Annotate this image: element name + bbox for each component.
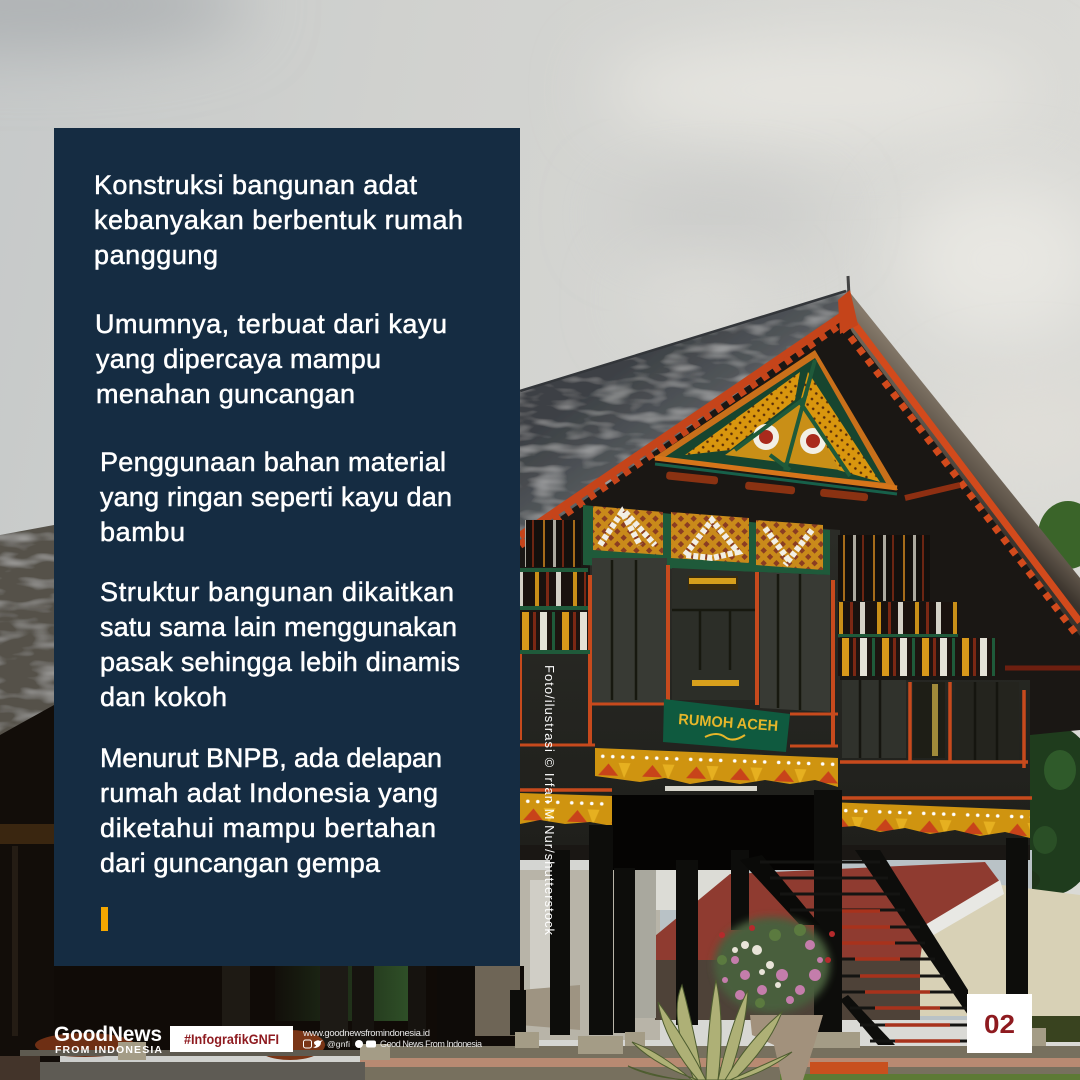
roof underside shadow — [520, 318, 1080, 860]
panel: text background — [54, 128, 520, 966]
text block: point 1 — [94, 170, 463, 270]
text block: point 3: yang ringan seperti kayu dan — [100, 482, 452, 512]
text block: point 1: kebanyakan berbentuk rumah — [94, 205, 463, 235]
text block: point 4: satu sama lain menggunakan — [100, 612, 457, 642]
text block: point 4: Struktur bangunan dikaitkan — [100, 577, 454, 607]
hashtag box: #InfografikGNFI — [184, 1032, 279, 1047]
house walls — [520, 505, 1030, 845]
footer social links — [302, 1028, 482, 1049]
text block: point 5: Menurut BNPB, ada delapan — [100, 743, 442, 773]
text block: point 1: Konstruksi bangunan adat — [94, 170, 417, 200]
text block: point 2 — [95, 309, 447, 409]
sign: Rumoh Aceh: RUMOH ACEH — [678, 711, 779, 735]
agave plant — [628, 980, 792, 1080]
under-house shade — [612, 795, 820, 870]
page number badge — [967, 994, 1032, 1053]
trees — [960, 501, 1080, 896]
stair — [740, 850, 968, 1045]
footer logo: GoodNews From Indonesia — [54, 1023, 162, 1056]
ground and pavement — [0, 1028, 1080, 1080]
accent bar — [101, 907, 108, 931]
text block: point 4: pasak sehingga lebih dinamis — [100, 647, 460, 677]
footer social links: www.goodnewsfromindonesia.id — [302, 1028, 430, 1039]
sign: Rumoh Aceh — [663, 699, 790, 752]
carved valances — [520, 748, 1030, 838]
footer social links: Good News From Indonesia — [380, 1039, 482, 1049]
text block: point 2: menahan guncangan — [96, 379, 355, 409]
text block: point 5 — [100, 743, 442, 878]
text block: point 1: panggung — [94, 240, 218, 270]
text block: point 3: bambu — [100, 517, 185, 547]
text block: point 3 — [100, 447, 452, 547]
balcony rails — [520, 520, 998, 676]
stilts — [510, 790, 1028, 1035]
flower pot — [714, 917, 835, 1080]
orange wall frames — [520, 565, 1080, 798]
text block: point 4: dan kokoh — [100, 682, 227, 712]
hashtag box — [170, 1026, 293, 1052]
text block: point 4 — [100, 577, 460, 712]
text block: point 3: Penggunaan bahan material — [100, 447, 446, 477]
page number badge: 02 — [984, 1009, 1015, 1039]
roof: thatch faces — [520, 276, 1080, 640]
text block: point 5: rumah adat Indonesia yang — [100, 778, 438, 808]
orange barge boards — [520, 290, 1080, 634]
footer logo: GoodNews From Indonesia: FROM INDONESIA — [55, 1044, 162, 1056]
text block: point 5: diketahui mampu bertahan — [100, 813, 436, 843]
left shaded ground below panel — [20, 966, 524, 1060]
distant sky and buildings behind stilts — [520, 850, 1080, 1042]
text block: point 5: dari guncangan gempa — [100, 848, 381, 878]
footer social links: @gnfi — [327, 1039, 350, 1049]
photo credit: Foto/ilustrasi © Irfan M Nur/shutterstock — [542, 665, 557, 936]
text block: point 2: yang dipercaya mampu — [96, 344, 381, 374]
footer logo: GoodNews From Indonesia: GoodNews — [54, 1023, 162, 1046]
left hut thatch and shaded underside — [0, 525, 60, 1080]
gable ornament — [653, 350, 960, 501]
text block: point 2: Umumnya, terbuat dari kayu — [95, 309, 447, 339]
lattice windows — [593, 506, 823, 570]
